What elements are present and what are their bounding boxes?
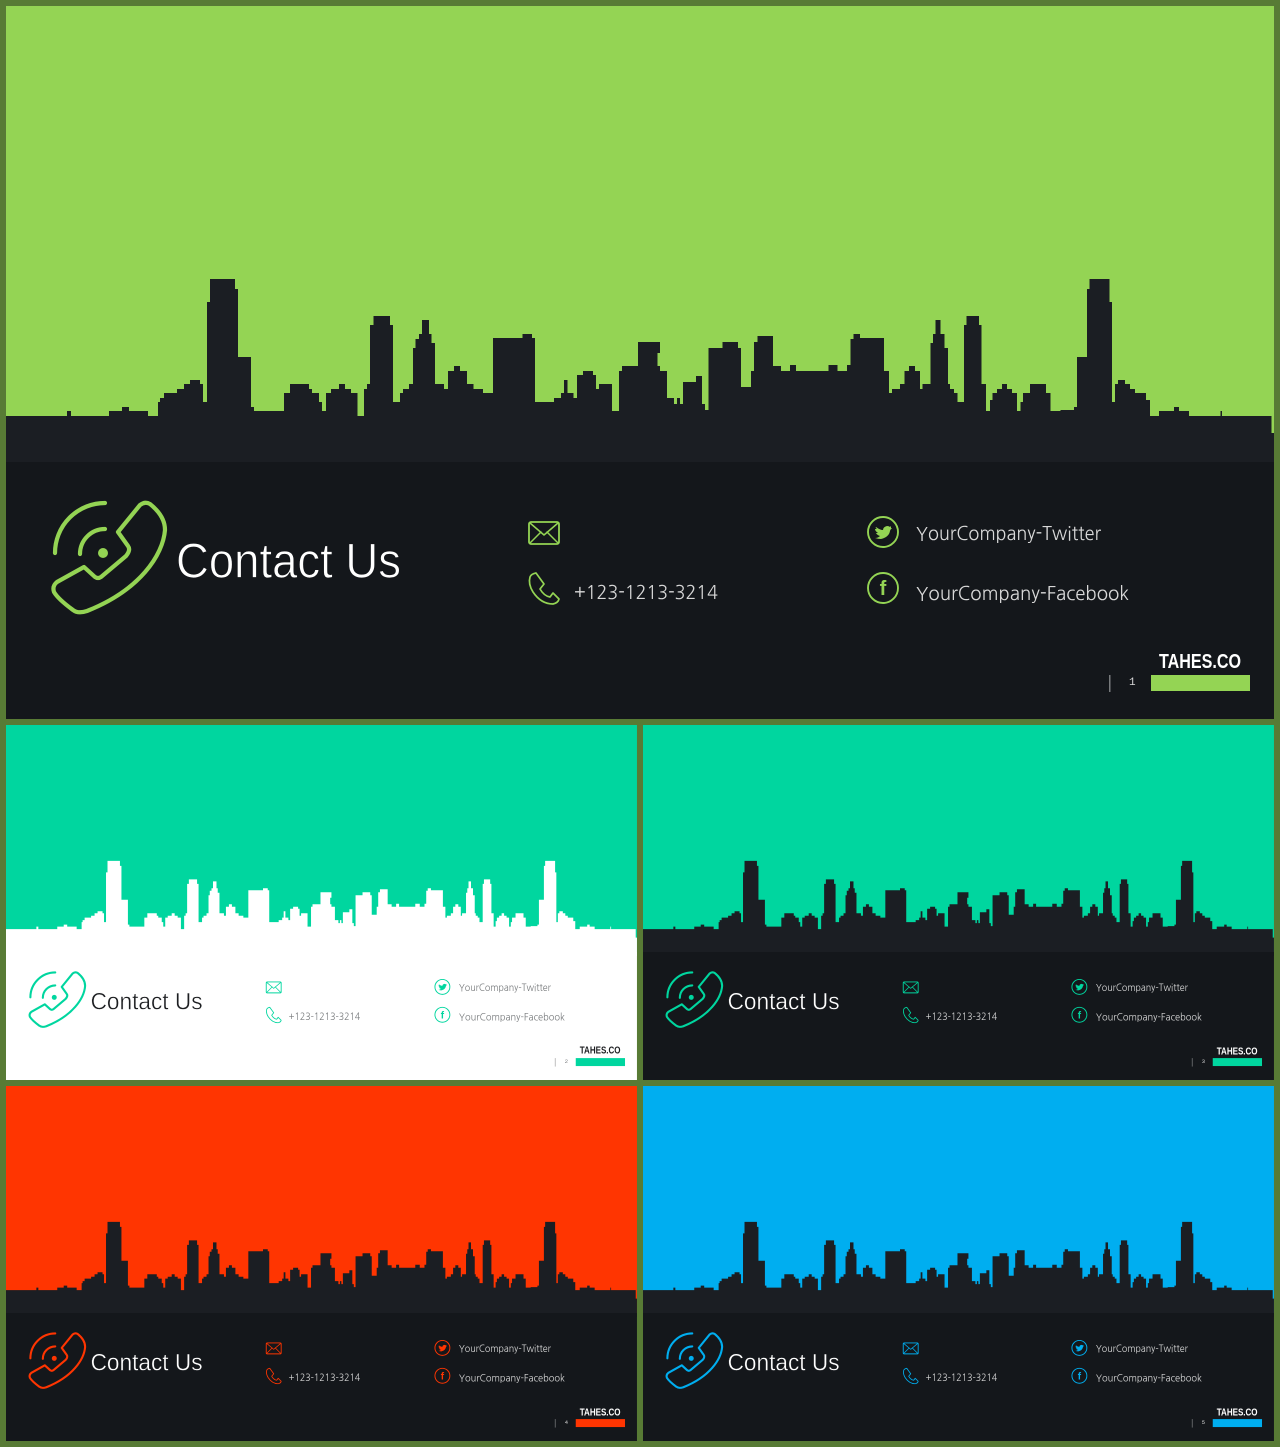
facebook label: YourCompany-Facebook (1096, 1014, 1202, 1023)
icon: handset (529, 573, 559, 604)
footer divider (1109, 675, 1110, 692)
brand name: TAHES.CO (1159, 651, 1241, 673)
facebook label: YourCompany-Facebook (1096, 1375, 1202, 1384)
facebook label: YourCompany-Facebook (916, 584, 1129, 603)
icon: handset (266, 1368, 281, 1384)
footer divider (554, 1419, 557, 1428)
icon: phone logo (667, 972, 722, 1027)
panel 5: blue slide (643, 1086, 1274, 1441)
icon: facebook (435, 1007, 450, 1022)
ground band (643, 952, 1274, 1080)
heading: Contact Us: Contact Us (728, 1350, 840, 1377)
icon: handset (903, 1368, 918, 1384)
sky background (643, 1086, 1274, 1313)
phone number: +123-1213-3214 (289, 1013, 361, 1022)
icon: facebook: f (1078, 1010, 1082, 1021)
twitter label: YourCompany-Twitter (459, 1345, 551, 1354)
icon: envelope (266, 982, 281, 993)
panel 1: green slide (6, 6, 1274, 719)
panel 2: teal and white slide (6, 725, 637, 1080)
icon: twitter (435, 1340, 450, 1355)
icon: facebook (435, 1368, 450, 1383)
footer color bar (1151, 675, 1250, 691)
footer divider (1191, 1419, 1194, 1428)
twitter label: YourCompany-Twitter (1096, 984, 1188, 993)
icon: twitter (868, 517, 898, 547)
footer color bar (576, 1058, 625, 1066)
icon: twitter (1072, 1340, 1087, 1355)
sky background (6, 6, 1274, 462)
phone number: +123-1213-3214 (289, 1374, 361, 1383)
twitter label: YourCompany-Twitter (459, 984, 551, 993)
panel 4: orange slide (6, 1086, 637, 1441)
sky background (6, 725, 637, 952)
phone number: +123-1213-3214 (926, 1013, 998, 1022)
heading: Contact Us: Contact Us (728, 989, 840, 1016)
footer divider (1191, 1058, 1194, 1067)
page number: 4 (565, 1419, 568, 1426)
city skyline silhouette (643, 861, 1274, 956)
icon: phone logo (30, 1333, 85, 1388)
ground band (6, 952, 637, 1080)
ground band (6, 1313, 637, 1441)
city skyline silhouette (643, 1222, 1274, 1317)
icon: facebook: f (441, 1371, 445, 1382)
ground band (643, 1313, 1274, 1441)
icon: facebook: f (880, 578, 887, 600)
brand name: TAHES.CO (580, 1408, 621, 1419)
phone number: +123-1213-3214 (574, 583, 718, 602)
facebook label: YourCompany-Facebook (459, 1014, 565, 1023)
icon: facebook (1072, 1368, 1087, 1383)
page number: 5 (1202, 1419, 1205, 1426)
facebook label: YourCompany-Facebook (459, 1375, 565, 1384)
icon: facebook (868, 573, 898, 603)
icon: phone logo (53, 503, 165, 612)
sky background (643, 725, 1274, 952)
ground band (6, 462, 1274, 719)
page number: 3 (1202, 1058, 1205, 1065)
twitter label: YourCompany-Twitter (1096, 1345, 1188, 1354)
brand name: TAHES.CO (580, 1046, 621, 1057)
footer divider (554, 1058, 557, 1067)
icon: envelope (903, 982, 918, 993)
icon: phone logo (667, 1333, 722, 1388)
icon: phone logo (30, 972, 85, 1027)
footer color bar (576, 1419, 625, 1427)
icon: twitter (435, 979, 450, 994)
icon: facebook: f (1078, 1371, 1082, 1382)
icon: facebook: f (441, 1010, 445, 1021)
brand name: TAHES.CO (1217, 1047, 1258, 1058)
city skyline silhouette (6, 1222, 637, 1317)
icon: handset (903, 1007, 918, 1023)
city skyline silhouette (6, 861, 637, 956)
footer color bar (1213, 1058, 1262, 1066)
icon: envelope (903, 1343, 918, 1354)
page number: 1 (1129, 677, 1136, 689)
icon: facebook (1072, 1007, 1087, 1022)
twitter label: YourCompany-Twitter (916, 524, 1101, 543)
icon: twitter (1072, 979, 1087, 994)
brand name: TAHES.CO (1217, 1408, 1258, 1419)
city skyline silhouette (6, 279, 1274, 470)
footer color bar (1213, 1419, 1262, 1427)
heading: Contact Us: Contact Us (176, 534, 401, 588)
sky background (6, 1086, 637, 1313)
icon: envelope (266, 1343, 281, 1354)
page number: 2 (565, 1058, 568, 1065)
heading: Contact Us: Contact Us (91, 989, 203, 1016)
panel 3: teal and dark slide (643, 725, 1274, 1080)
icon: handset (266, 1007, 281, 1023)
heading: Contact Us: Contact Us (91, 1350, 203, 1377)
phone number: +123-1213-3214 (926, 1374, 998, 1383)
icon: envelope (529, 522, 559, 544)
